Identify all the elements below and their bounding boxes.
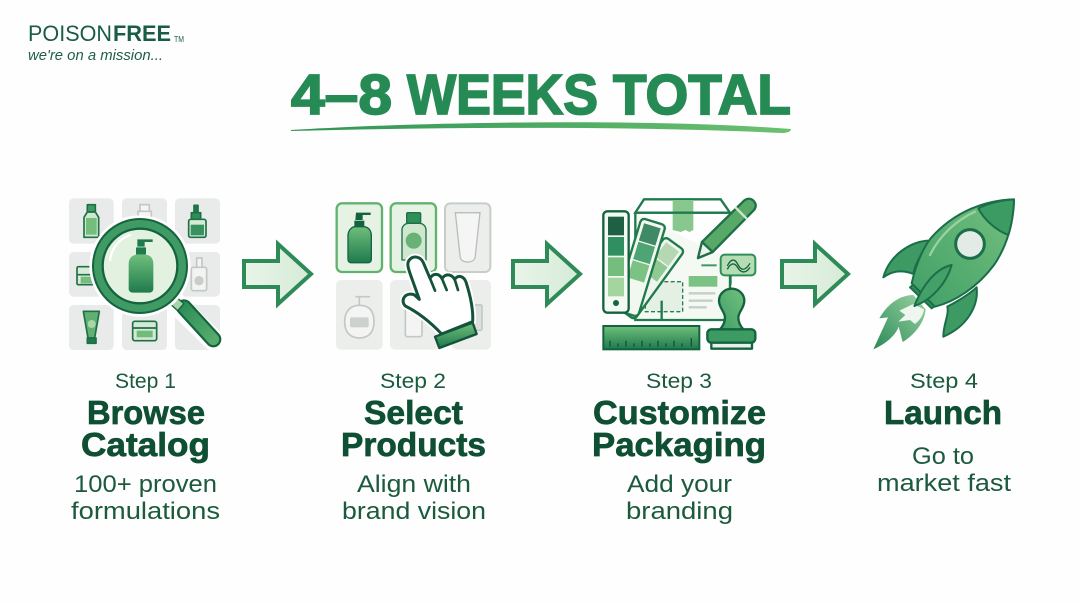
step 1 description [71, 471, 220, 525]
label placeholder [645, 282, 683, 312]
step 3 heading [592, 394, 766, 463]
dropper bottle [189, 205, 206, 237]
step 4 icon: rocket [873, 199, 1014, 349]
body highlight [930, 212, 975, 255]
grey tile [445, 203, 490, 272]
step 4 text [877, 370, 1011, 497]
logo tag [721, 255, 755, 275]
magnifier lens [89, 215, 191, 317]
trademark: TM [174, 35, 184, 44]
round label bottle [402, 213, 426, 260]
step 1 heading: Catalog [81, 426, 210, 463]
jar [77, 267, 94, 285]
nozzle [910, 282, 939, 308]
grey dropper [191, 258, 207, 291]
step 4 description: market fast [877, 470, 1011, 497]
step 3 description [626, 471, 733, 525]
fanned swatch back [615, 237, 685, 320]
flat jar [133, 321, 157, 341]
lens pump bottle [129, 239, 153, 293]
step 2 icon: selecting products [336, 203, 491, 350]
step 4 description: Go to [912, 443, 974, 470]
magnifier handle [173, 301, 213, 340]
step 1 label: Step 1 [115, 370, 176, 393]
ruler [603, 326, 699, 349]
small bottle [84, 205, 99, 237]
step 1 heading [81, 394, 210, 463]
step 3 text [592, 370, 766, 525]
window [956, 230, 984, 258]
title underline [291, 122, 791, 133]
pencil [698, 199, 756, 258]
step 4 description [877, 443, 1011, 497]
step 2 description: Align with [357, 471, 471, 498]
step 3 icon: packaging tools [603, 199, 756, 349]
step 1 text [71, 370, 220, 525]
faded soap dispenser [345, 297, 374, 338]
step 2 description: brand vision [342, 498, 486, 525]
right fin [943, 287, 977, 337]
step 2 heading: Products [341, 426, 486, 463]
step 3 heading: Customize [593, 394, 766, 431]
label lines [689, 276, 717, 287]
arrow 1 [244, 244, 311, 304]
title text: WEEKS [407, 63, 598, 127]
step 2 description [342, 471, 486, 525]
centre fin [914, 265, 952, 306]
tube [83, 311, 99, 343]
selected tile 1 [337, 203, 382, 272]
pump bottle [348, 213, 371, 263]
step 3 label: Step 3 [646, 370, 712, 393]
swatch strip [603, 211, 629, 313]
tape [673, 200, 693, 232]
arrow 3 [782, 244, 848, 304]
hand cursor [403, 257, 477, 348]
fanned swatch mid [614, 218, 666, 317]
cuff [435, 323, 477, 348]
step 1 description: 100+ proven [74, 471, 217, 498]
step 4 label: Step 4 [910, 370, 978, 393]
catalog tiles [69, 198, 220, 350]
left fin [883, 241, 932, 277]
grey tube [455, 213, 480, 262]
selected tile 2 [391, 203, 436, 272]
step 2 heading: Select [364, 394, 463, 431]
step 3 description: branding [626, 498, 733, 525]
arrow 2 [513, 244, 580, 304]
logo tagline: we're on a mission... [28, 47, 163, 64]
title text: 4–8 [291, 63, 392, 127]
step 2 heading [341, 394, 486, 463]
box [635, 199, 730, 320]
title [291, 63, 791, 133]
logo wordmark: POISONFREE [28, 21, 171, 46]
body [912, 199, 1014, 307]
nose cone [978, 199, 1014, 235]
step 2 label: Step 2 [380, 370, 446, 393]
step 4 heading: Launch [884, 394, 1002, 431]
faded tiles [336, 280, 491, 350]
title text: TOTAL [613, 63, 791, 127]
stamp [707, 289, 755, 349]
logo [28, 21, 184, 64]
step 1 description: formulations [71, 498, 220, 525]
step 3 heading: Packaging [592, 426, 766, 463]
step 3 description: Add your [627, 471, 732, 498]
faded bottles [405, 303, 482, 337]
white bottle [138, 205, 151, 223]
step 1 icon: magnifier over catalog [69, 198, 220, 350]
flame [873, 295, 926, 349]
step 1 heading: Browse [87, 394, 205, 431]
step 2 text [341, 370, 486, 525]
